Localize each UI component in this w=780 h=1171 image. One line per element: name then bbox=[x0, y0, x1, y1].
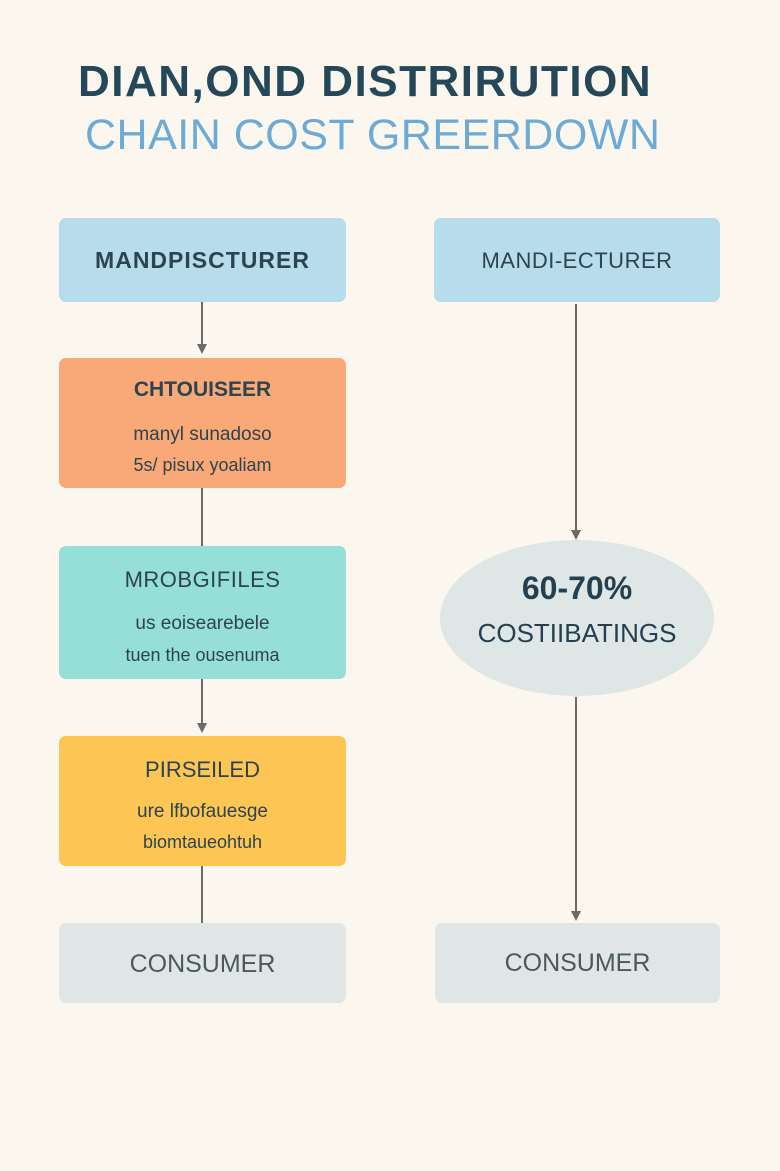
box: retailer: biomtaueohtuh bbox=[143, 832, 262, 852]
box: manufacturer right bbox=[434, 218, 720, 302]
line 2 bbox=[201, 488, 203, 546]
arrow right 2 bbox=[571, 697, 581, 921]
box: retailer: PIRSEILED bbox=[145, 757, 260, 782]
ellipse: cost bbox=[440, 540, 714, 696]
line 4 bbox=[201, 866, 203, 923]
title: DIAN,OND DISTRIRUTION bbox=[78, 57, 652, 106]
box: distributor: manyl sunadoso bbox=[133, 424, 272, 445]
box: consumer left bbox=[59, 923, 346, 1003]
box: retailer bbox=[59, 736, 346, 866]
box: distributor: 5s/ pisux yoaliam bbox=[133, 455, 272, 475]
arrow 3 bbox=[197, 679, 207, 733]
box: wholesaler: MROBGIFILES bbox=[125, 567, 280, 592]
box: distributor: CHTOUISEER bbox=[134, 378, 271, 401]
box: consumer right bbox=[435, 923, 720, 1003]
title bbox=[78, 57, 660, 159]
arrow 1 bbox=[197, 302, 207, 354]
arrow right 1 bbox=[571, 304, 581, 540]
box: manufacturer left: MANDPISCTURER bbox=[95, 247, 310, 273]
ellipse: cost: 60-70% bbox=[522, 570, 632, 606]
box: manufacturer left bbox=[59, 218, 346, 302]
title: CHAIN COST GREERDOWN bbox=[85, 111, 660, 159]
ellipse: cost: COSTIIBATINGS bbox=[478, 618, 676, 648]
box: retailer: ure lfbofauesge bbox=[137, 801, 268, 822]
box: wholesaler: tuen the ousenuma bbox=[125, 645, 280, 665]
box: manufacturer right: MANDI-ECTURER bbox=[481, 248, 673, 273]
box: wholesaler bbox=[59, 546, 346, 679]
box: wholesaler: us eoisearebele bbox=[135, 613, 270, 634]
box: consumer left: CONSUMER bbox=[130, 950, 275, 978]
box: distributor bbox=[59, 358, 346, 488]
box: consumer right: CONSUMER bbox=[505, 949, 650, 977]
